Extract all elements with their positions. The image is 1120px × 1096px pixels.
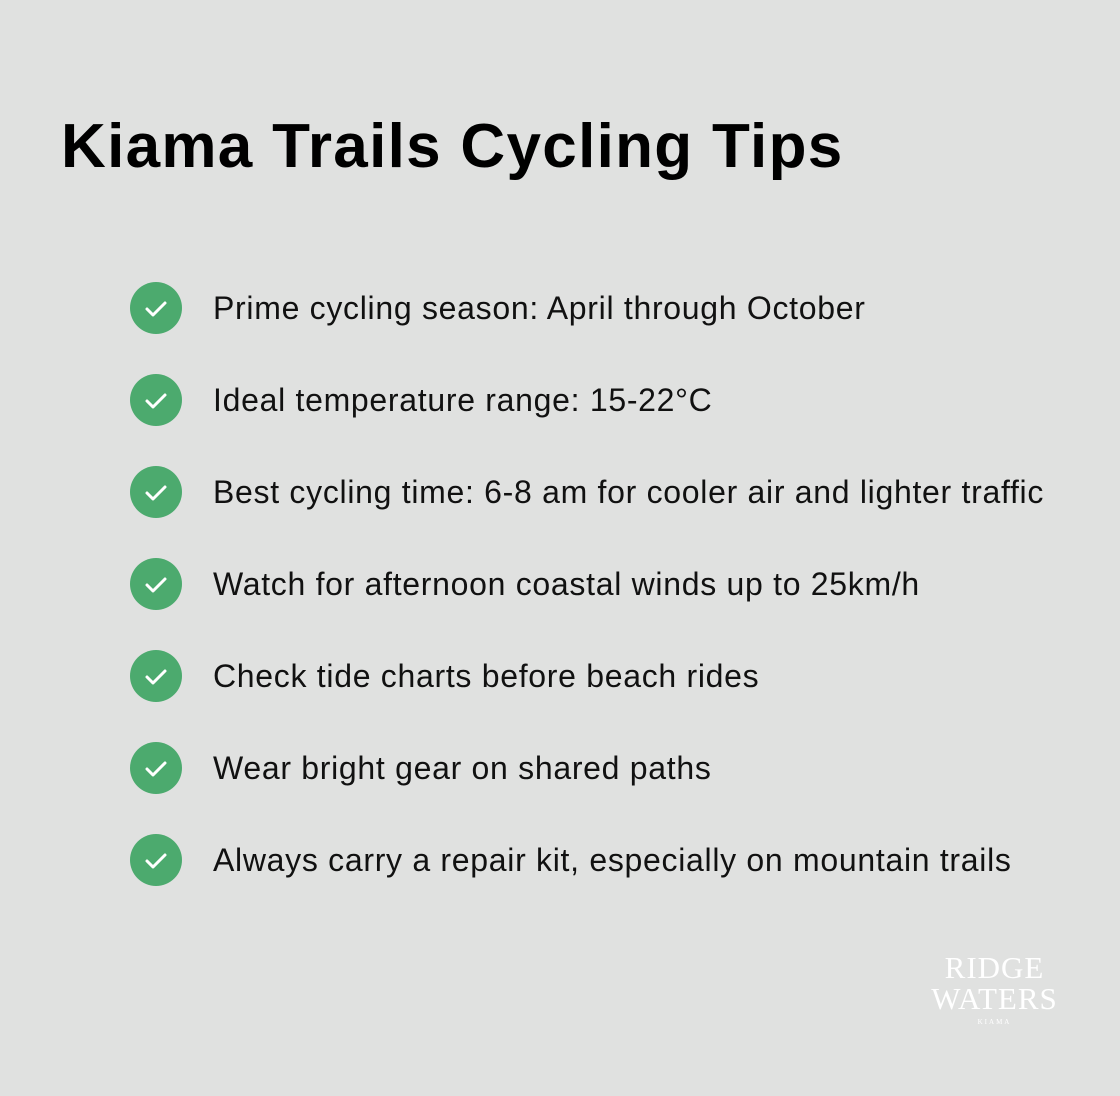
tip 4 bbox=[130, 558, 920, 610]
title: Kiama Trails Cycling Tips bbox=[61, 112, 844, 181]
tip 2 bbox=[130, 374, 712, 426]
tip 5: Check tide charts before beach rides bbox=[213, 658, 759, 694]
tip 7: Always carry a repair kit, especially on mountain trails bbox=[213, 842, 1012, 878]
logo bbox=[931, 950, 1058, 1026]
tip 2: Ideal temperature range: 15-22°C bbox=[213, 382, 712, 418]
logo: KIAMA bbox=[978, 1018, 1011, 1026]
tip 1 bbox=[130, 282, 866, 334]
tip 6 bbox=[130, 742, 712, 794]
tip 5 bbox=[130, 650, 759, 702]
tip 1: Prime cycling season: April through October bbox=[213, 290, 866, 326]
tip 3 bbox=[130, 466, 1044, 518]
logo: RIDGE bbox=[945, 950, 1044, 985]
tip 7 bbox=[130, 834, 1012, 886]
tip 3: Best cycling time: 6-8 am for cooler air and lighter traffic bbox=[213, 474, 1044, 510]
logo: WATERS bbox=[931, 981, 1058, 1016]
tip 6: Wear bright gear on shared paths bbox=[213, 750, 712, 786]
tip 4: Watch for afternoon coastal winds up to 25km/h bbox=[213, 566, 920, 602]
